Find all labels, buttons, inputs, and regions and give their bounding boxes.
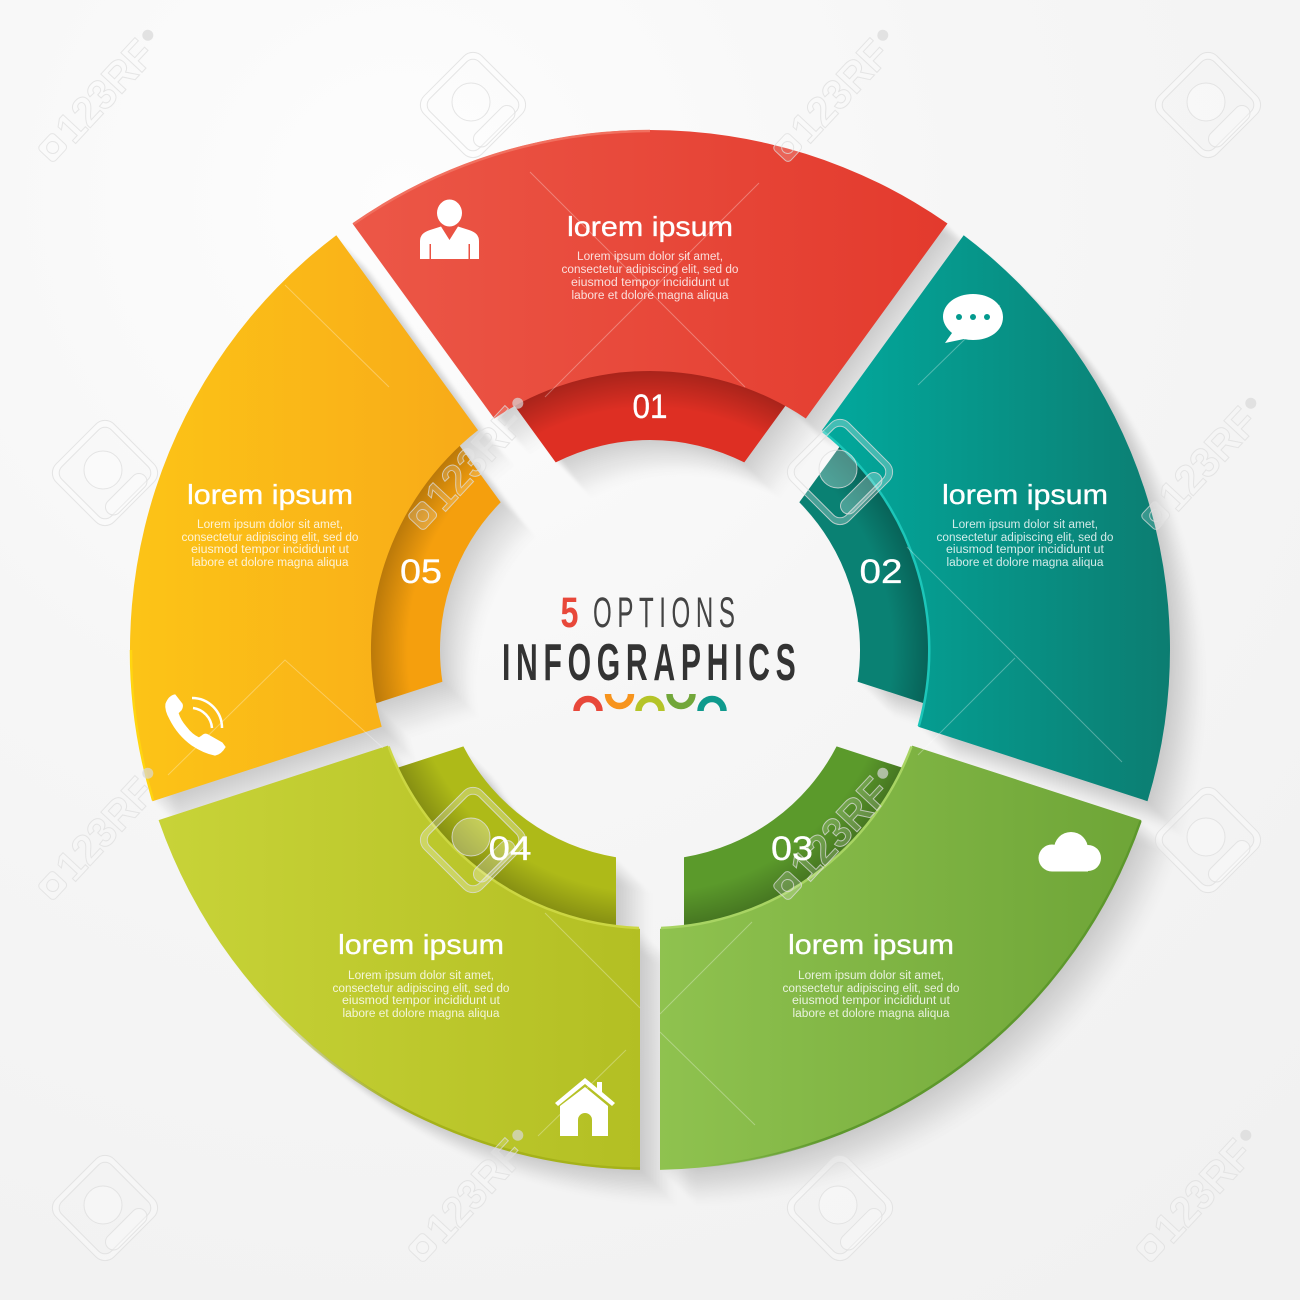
number 02: 02 bbox=[860, 553, 902, 591]
ring 02 bbox=[799, 441, 935, 705]
panel text 03: lorem ipsum bbox=[788, 929, 954, 960]
icon: speech bubble bbox=[943, 294, 1003, 343]
panel text 04 bbox=[332, 929, 510, 1020]
mini arcs bbox=[576, 694, 724, 711]
panel text 04: Lorem ipsum dolor sit amet, bbox=[348, 970, 494, 982]
long flat shadows bbox=[132, 131, 1206, 1206]
watermark text stamps: 123RF bbox=[1149, 398, 1267, 520]
segment 05 amber bbox=[130, 235, 478, 801]
panel text 04: eiusmod tempor incididunt ut bbox=[342, 995, 501, 1007]
panel text 05: consectetur adipiscing elit, sed do bbox=[182, 532, 358, 544]
panel text 02: consectetur adipiscing elit, sed do bbox=[936, 532, 1114, 544]
panel text 02 bbox=[936, 479, 1114, 569]
segment 02 teal bbox=[822, 235, 1170, 801]
panel text 05: eiusmod tempor incididunt ut bbox=[191, 544, 350, 556]
number 03: 03 bbox=[771, 830, 813, 868]
segment 03 green bbox=[660, 746, 1141, 1170]
icon: cloud bbox=[1038, 832, 1101, 872]
number 01: 01 bbox=[632, 388, 668, 426]
title line: infographics: INFOGRAPHICS bbox=[502, 635, 801, 692]
panel text 05: lorem ipsum bbox=[187, 479, 353, 510]
segment 04 lime bbox=[159, 746, 640, 1170]
panel text 02: labore et dolore magna aliqua bbox=[946, 557, 1104, 569]
panel text 03: eiusmod tempor incididunt ut bbox=[792, 995, 951, 1007]
watermark text stamps: 123RF bbox=[781, 30, 899, 152]
ring 05 bbox=[365, 441, 501, 705]
panel text 04: lorem ipsum bbox=[338, 929, 504, 960]
panel text 02: lorem ipsum bbox=[942, 479, 1108, 510]
panel text 03 bbox=[782, 929, 960, 1020]
watermark text stamps: 123RF bbox=[1144, 1130, 1262, 1252]
inner number rings bbox=[365, 365, 935, 933]
icon: person bbox=[420, 200, 479, 259]
panel text 01 bbox=[562, 211, 738, 302]
ring 04 bbox=[391, 746, 616, 933]
center title bbox=[502, 589, 801, 711]
panel text 01: eiusmod tempor incididunt ut bbox=[571, 277, 730, 289]
title line: 5 options: OPTIONS bbox=[593, 589, 741, 637]
panel text 05: labore et dolore magna aliqua bbox=[192, 557, 349, 569]
panel text 03: Lorem ipsum dolor sit amet, bbox=[798, 970, 944, 982]
watermark text stamps: 123RF bbox=[46, 30, 164, 152]
watermark text stamps: 123RF bbox=[781, 768, 899, 890]
panel text 03: consectetur adipiscing elit, sed do bbox=[782, 983, 960, 995]
icon: house bbox=[555, 1078, 615, 1136]
icon: phone bbox=[166, 695, 225, 755]
watermark text stamps: 123RF bbox=[46, 768, 164, 890]
panel text 02: Lorem ipsum dolor sit amet, bbox=[952, 519, 1098, 531]
panel text 01: consectetur adipiscing elit, sed do bbox=[562, 264, 738, 276]
panel text 01: labore et dolore magna aliqua bbox=[572, 290, 729, 302]
watermark diagonal lines bbox=[168, 172, 1122, 1136]
segment 01 red bbox=[352, 130, 948, 419]
panel text 04: consectetur adipiscing elit, sed do bbox=[332, 983, 510, 995]
panel text 02: eiusmod tempor incididunt ut bbox=[946, 544, 1105, 556]
ring 01 bbox=[511, 365, 789, 462]
panel text 01: lorem ipsum bbox=[567, 211, 733, 242]
panel text 01: Lorem ipsum dolor sit amet, bbox=[577, 251, 723, 263]
number 05: 05 bbox=[400, 553, 442, 591]
panel text 05: Lorem ipsum dolor sit amet, bbox=[197, 519, 343, 531]
watermark text stamps: 123RF bbox=[416, 1130, 534, 1252]
number 04: 04 bbox=[488, 830, 532, 868]
panel text 05 bbox=[182, 479, 358, 569]
panel text 03: labore et dolore magna aliqua bbox=[792, 1008, 950, 1020]
title line: 5 options: 5 bbox=[560, 590, 578, 637]
watermark text stamps: 123RF bbox=[416, 398, 534, 520]
ring 03 bbox=[684, 746, 909, 933]
panel text 04: labore et dolore magna aliqua bbox=[342, 1008, 500, 1020]
